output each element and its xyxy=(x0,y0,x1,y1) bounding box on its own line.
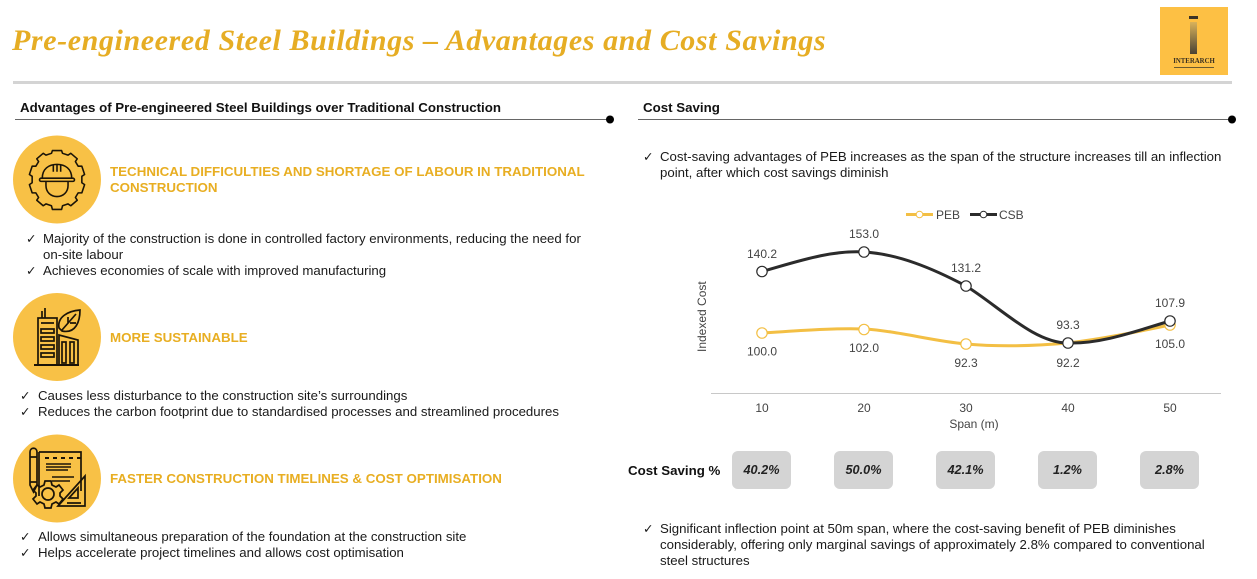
CSB series: 153.0 xyxy=(849,227,879,241)
list: faster construction points: ✓ xyxy=(20,546,30,560)
CSB series: 140.2 xyxy=(747,247,777,261)
heading: more sustainable: MORE SUSTAINABLE xyxy=(110,330,248,345)
header divider xyxy=(13,81,1232,84)
axes labels: Span (m) xyxy=(949,417,999,431)
list: sustainable points: ✓ xyxy=(20,405,30,419)
list: technical points xyxy=(26,231,581,278)
legend: PEB xyxy=(936,208,960,222)
heading: technical difficulties: TECHNICAL DIFFICULTIES AND SHORTAGE OF LABOUR IN TRADITIONAL CONSTRUCTION xyxy=(110,164,584,195)
icon: plans and tools xyxy=(13,434,101,522)
list: technical points: ✓ xyxy=(26,232,36,246)
text: inflection note: steel structures xyxy=(660,553,750,568)
axes labels: 10 xyxy=(755,401,769,415)
PEB series: 105.0 xyxy=(1155,337,1185,351)
list: faster construction points: ✓ xyxy=(20,530,30,544)
pill: 10m xyxy=(732,451,791,489)
PEB series: 92.3 xyxy=(954,356,978,370)
heading: faster construction: FASTER CONSTRUCTION TIMELINES & COST OPTIMISATION xyxy=(110,471,502,486)
text: cost saving intro: Cost-saving advantages of PEB increases as the span of the structure increases till an inflection xyxy=(660,149,1221,164)
text: inflection note: considerably, offering only marginal savings of approximately 2.8% compared to conventional xyxy=(660,537,1205,552)
pill: 50m: 2.8% xyxy=(1155,463,1184,477)
list: technical points: Majority of the construction is done in controlled factory environments, reducing the need for xyxy=(43,231,581,246)
list: technical points: on-site labour xyxy=(43,247,123,262)
list: sustainable points xyxy=(20,388,559,419)
pill: 20m xyxy=(834,451,893,489)
axes labels: 50 xyxy=(1163,401,1177,415)
pill: 50m xyxy=(1140,451,1199,489)
label: cost saving percent: Cost Saving % xyxy=(628,463,720,478)
list: faster construction points: Allows simultaneous preparation of the foundation at the construction site xyxy=(38,529,466,544)
CSB series xyxy=(747,227,1185,348)
pill: 10m: 40.2% xyxy=(744,463,779,477)
pill: 40m xyxy=(1038,451,1097,489)
icon: gear with helmet xyxy=(13,136,101,224)
logo: INTERARCH xyxy=(1173,58,1215,65)
list: technical points: Achieves economies of scale with improved manufacturing xyxy=(43,263,386,278)
pill: 20m: 50.0% xyxy=(846,463,881,477)
legend xyxy=(906,208,1024,222)
list: sustainable points: ✓ xyxy=(20,389,30,403)
list: sustainable points: Causes less disturbance to the construction site’s surroundings xyxy=(38,388,407,403)
text: cost saving intro: ✓ xyxy=(643,150,653,164)
PEB series xyxy=(747,320,1185,370)
axes labels: 40 xyxy=(1061,401,1075,415)
legend: CSB xyxy=(999,208,1024,222)
axes labels xyxy=(695,281,1221,431)
CSB series: 93.3 xyxy=(1056,318,1080,332)
axes labels: 20 xyxy=(857,401,871,415)
list: faster construction points: Helps accelerate project timelines and allows cost optimisation xyxy=(38,545,404,560)
logo xyxy=(1160,7,1228,75)
text: inflection note: Significant inflection point at 50m span, where the cost-saving benefit of PEB diminishes xyxy=(660,521,1176,536)
pill: 30m xyxy=(936,451,995,489)
text: inflection note xyxy=(643,521,1205,568)
list: technical points: ✓ xyxy=(26,264,36,278)
text: cost saving intro: point, after which cost savings diminish xyxy=(660,165,888,180)
pill: 40m: 1.2% xyxy=(1053,463,1082,477)
text: inflection note: ✓ xyxy=(643,522,653,536)
PEB series: 92.2 xyxy=(1056,356,1080,370)
list: sustainable points: Reduces the carbon footprint due to standardised processes and streamlined procedures xyxy=(38,404,559,419)
CSB series: 107.9 xyxy=(1155,296,1185,310)
text: cost saving intro xyxy=(643,149,1221,180)
CSB series: 131.2 xyxy=(951,261,981,275)
axes labels: 30 xyxy=(959,401,973,415)
PEB series: 100.0 xyxy=(747,344,777,358)
icon: green building xyxy=(13,293,101,381)
list: faster construction points xyxy=(20,529,466,560)
axes labels: Indexed Cost xyxy=(695,281,709,352)
pill: 30m: 42.1% xyxy=(948,463,983,477)
heading: advantages: Advantages of Pre-engineered Steel Buildings over Traditional Construction xyxy=(20,100,501,115)
heading: cost saving: Cost Saving xyxy=(643,100,720,115)
title: Pre-engineered Steel Buildings – Advantages and Cost Savings xyxy=(12,24,826,57)
PEB series: 102.0 xyxy=(849,341,879,355)
